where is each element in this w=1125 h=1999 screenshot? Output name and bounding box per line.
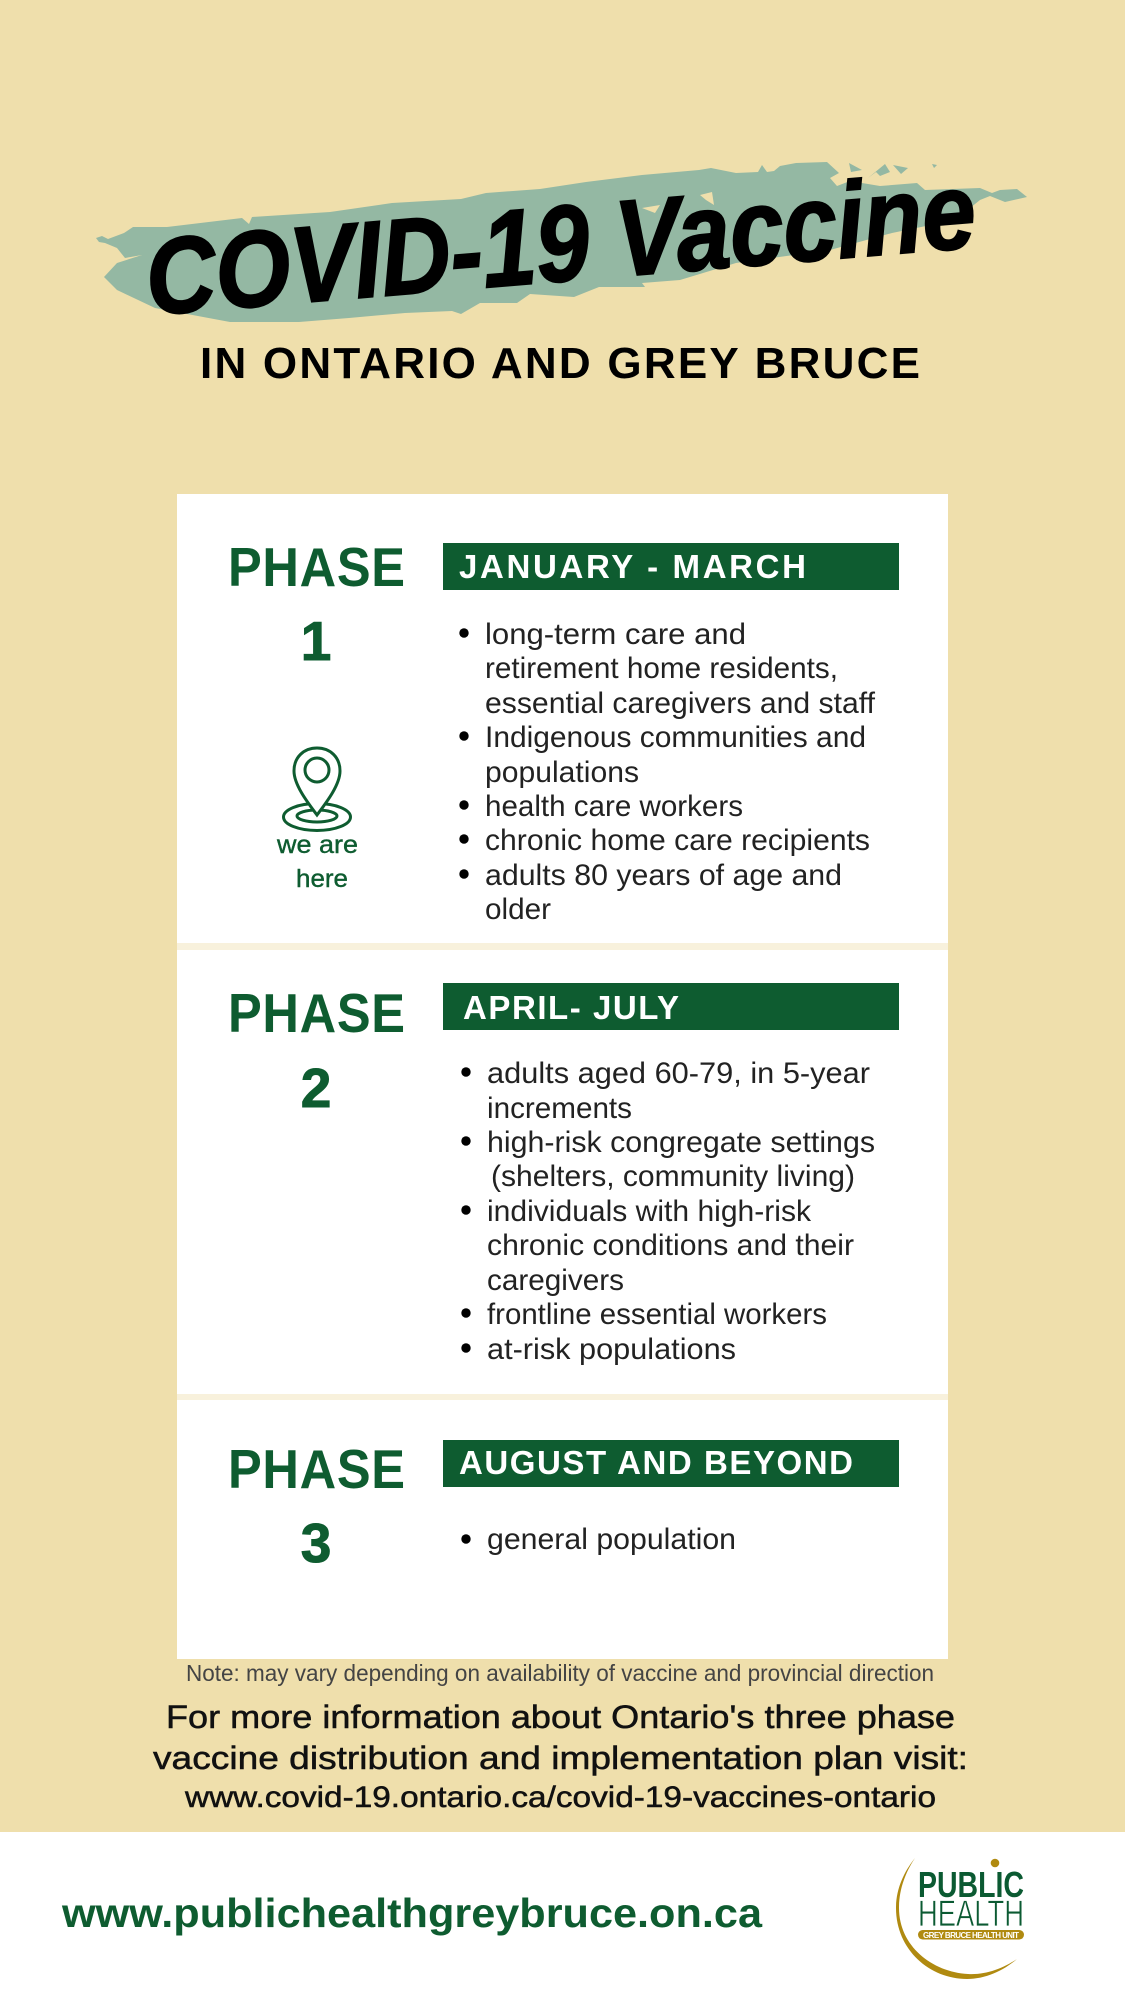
- list: phase 2 groups: high-risk congregate settings: [487, 1126, 875, 1159]
- list: phase 2 groups: [461, 1057, 875, 1366]
- heading: phase 2: 2: [301, 1057, 331, 1119]
- heading: phase 3: [228, 1439, 405, 1574]
- heading: phase 1: 1: [301, 610, 331, 672]
- footer website: www.publichealthgreybruce.on.ca: [61, 1890, 763, 1936]
- date bar: August and beyond: [443, 1440, 899, 1487]
- logo: Public Health Grey Bruce Health Unit: HEALTH: [918, 1893, 1024, 1934]
- date bar: April - July: APRIL- JULY: [463, 989, 679, 1026]
- list: phase 1 groups: chronic home care recipients: [485, 824, 870, 857]
- heading: phase 3: PHASE: [228, 1439, 405, 1500]
- list: phase 2 groups: (shelters, community living): [491, 1160, 855, 1193]
- note: Note: may vary depending on availability of vaccine and provincial direction: [186, 1660, 934, 1686]
- heading: phase 2: [228, 983, 405, 1119]
- list: phase 1 groups: populations: [485, 756, 639, 789]
- subtitle: IN ONTARIO AND GREY BRUCE: [200, 339, 920, 388]
- text block: more information: www.covid-19.ontario.ca/covid-19-vaccines-ontario: [184, 1781, 936, 1814]
- heading: phase 2: PHASE: [228, 983, 405, 1044]
- heading: phase 1: [228, 537, 405, 672]
- label: we are here: we are: [276, 831, 358, 859]
- list: phase 1 groups: long-term care and: [485, 618, 746, 651]
- logo: Public Health Grey Bruce Health Unit: GREY BRUCE HEALTH UNIT: [923, 1931, 1019, 1940]
- label: we are here: [276, 831, 358, 893]
- list: phase 2 groups: chronic conditions and their: [487, 1229, 854, 1262]
- list: phase 1 groups: [459, 618, 876, 926]
- list: phase 1 groups: health care workers: [485, 790, 743, 823]
- list: phase 2 groups: at-risk populations: [487, 1333, 736, 1366]
- footer band: [0, 1832, 1125, 1999]
- title: COVID-19 Vaccine: COVID-19 Vaccine: [141, 149, 980, 338]
- date bar: January - March: [443, 543, 899, 590]
- date bar: August and beyond: AUGUST AND BEYOND: [459, 1444, 853, 1481]
- panel: phase 1: [228, 537, 899, 926]
- list: phase 2 groups: adults aged 60-79, in 5-year: [487, 1057, 870, 1090]
- heading: phase 1: PHASE: [228, 537, 405, 598]
- logo: Public Health Grey Bruce Health Unit: PUBLIC: [918, 1864, 1024, 1905]
- list: phase 1 groups: Indigenous communities and: [485, 721, 866, 754]
- heading: phase 3: 3: [301, 1512, 331, 1574]
- text block: more information: vaccine distribution and implementation plan visit:: [153, 1740, 968, 1776]
- text block: more information: [153, 1699, 968, 1814]
- list: phase 2 groups: individuals with high-risk: [487, 1195, 811, 1228]
- date bar: April - July: [443, 983, 899, 1030]
- icon: location pin: [284, 748, 350, 830]
- logo: Public Health Grey Bruce Health Unit: [896, 1858, 1024, 1979]
- text block: more information: For more information about Ontario's three phase: [166, 1699, 955, 1735]
- list: phase 2 groups: caregivers: [487, 1264, 624, 1297]
- list: phase 1 groups: adults 80 years of age and: [485, 859, 842, 892]
- panel: phase 2: [228, 983, 899, 1366]
- list: phase 1 groups: older: [485, 893, 551, 926]
- list: phase 3 groups: general population: [487, 1523, 736, 1556]
- panel: white phase card: [177, 494, 948, 1659]
- panel: phase 3: [228, 1439, 899, 1574]
- list: phase 2 groups: increments: [487, 1092, 632, 1125]
- label: we are here: here: [296, 865, 348, 893]
- list: phase 1 groups: essential caregivers and staff: [485, 687, 876, 720]
- date bar: January - March: JANUARY - MARCH: [459, 548, 806, 585]
- list: phase 2 groups: frontline essential workers: [487, 1298, 827, 1331]
- list: phase 1 groups: retirement home residents,: [485, 652, 838, 685]
- title block: [96, 149, 1027, 388]
- brush stroke behind title: [96, 162, 1027, 322]
